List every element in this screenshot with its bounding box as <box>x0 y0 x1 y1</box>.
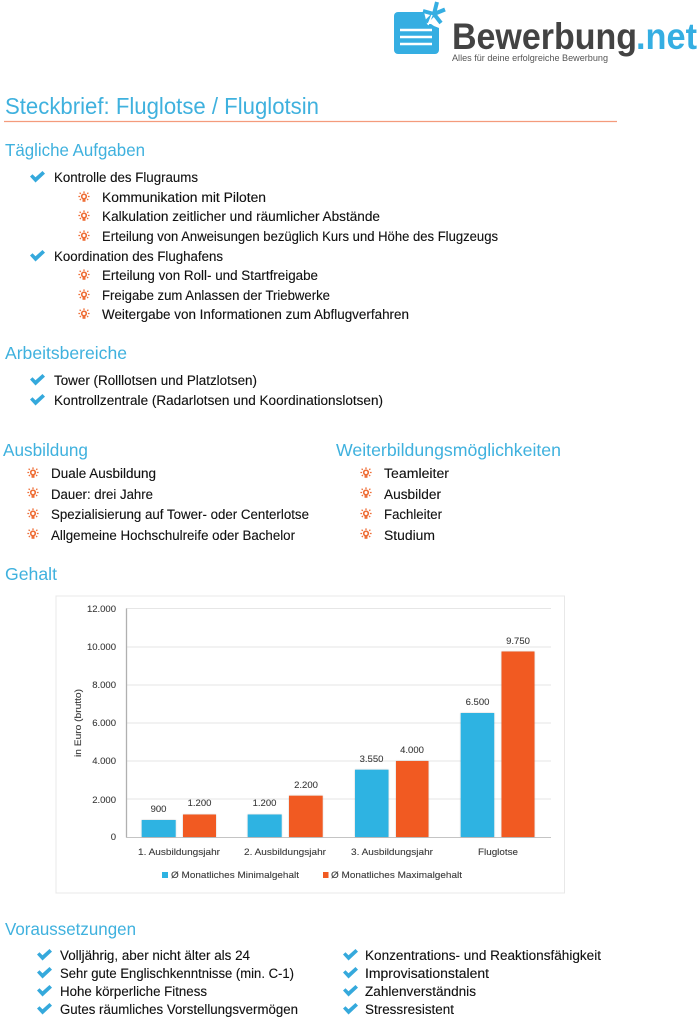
logo: .net <box>636 16 697 57</box>
value labels: 6.500 <box>466 697 489 708</box>
legend <box>162 870 462 881</box>
y axis title: in Euro (brutto) <box>73 689 84 757</box>
icon: logo document <box>394 2 445 54</box>
heading: Arbeitsbereiche <box>5 343 127 363</box>
section: Ausbildung: Duale Ausbildung <box>51 466 156 481</box>
section: Tägliche Aufgaben: Erteilung von Roll- und Startfreigabe <box>102 268 318 283</box>
value labels: 2.200 <box>294 780 318 791</box>
section: Tägliche Aufgaben: Kommunikation mit Piloten <box>102 190 266 205</box>
bar chart: Gehalt <box>56 596 564 893</box>
section: Tägliche Aufgaben: Kalkulation zeitlicher und räumlicher Abstände <box>102 209 380 224</box>
value labels: 9.750 <box>506 636 530 647</box>
section: Tägliche Aufgaben: Koordination des Flughafens <box>54 249 223 264</box>
y axis labels <box>87 604 116 843</box>
y axis labels: 12.000 <box>87 604 116 615</box>
section: Tägliche Aufgaben: Erteilung von Anweisungen bezüglich Kurs und Höhe des Flugzeugs <box>102 229 498 244</box>
section: Arbeitsbereiche: Tower (Rolllotsen und Platzlotsen) <box>54 373 257 388</box>
section: Weiterbildungsmöglichkeiten: Ausbilder <box>384 487 442 502</box>
y axis labels: 4.000 <box>92 756 116 767</box>
category labels: 2. Ausbildungsjahr <box>244 847 326 858</box>
category labels: Fluglotse <box>478 847 518 858</box>
section: Ausbildung <box>3 440 309 543</box>
y axis labels: 10.000 <box>87 642 116 653</box>
section: Tägliche Aufgaben <box>5 140 498 322</box>
heading: Weiterbildungsmöglichkeiten <box>336 440 561 460</box>
section: Arbeitsbereiche: Kontrollzentrale (Radarlotsen und Koordinationslotsen) <box>54 393 383 408</box>
section: Ausbildung: Allgemeine Hochschulreife oder Bachelor <box>51 528 295 543</box>
heading: Ausbildung <box>3 440 88 460</box>
section: Tägliche Aufgaben: Kontrolle des Flugraums <box>54 170 198 185</box>
heading: Gehalt: Gehalt <box>5 564 57 584</box>
right list: Zahlenverständnis <box>365 984 476 999</box>
section: Voraussetzungen <box>5 919 601 1017</box>
bars <box>142 652 534 837</box>
title: Steckbrief: Fluglotse / Fluglotsin <box>5 93 319 119</box>
value labels: 1.200 <box>253 798 276 809</box>
left list: Hohe körperliche Fitness <box>60 984 207 999</box>
value labels: 3.550 <box>360 754 383 765</box>
section: Weiterbildungsmöglichkeiten: Teamleiter <box>384 466 450 481</box>
right list <box>343 948 601 1017</box>
y axis labels: 6.000 <box>92 718 116 729</box>
section: Weiterbildungsmöglichkeiten: Fachleiter <box>384 507 442 522</box>
left list: Sehr gute Englischkenntnisse (min. C-1) <box>60 966 294 981</box>
right list: Konzentrations- und Reaktionsfähigkeit <box>365 948 601 963</box>
logo tagline: Alles für deine erfolgreiche Bewerbung <box>452 53 608 64</box>
section: Tägliche Aufgaben: Weitergabe von Informationen zum Abflugverfahren <box>102 307 409 322</box>
left list: Gutes räumliches Vorstellungsvermögen <box>60 1002 298 1017</box>
section: Weiterbildungsmöglichkeiten <box>336 440 561 543</box>
logo <box>394 2 697 64</box>
section: Tägliche Aufgaben: Freigabe zum Anlassen der Triebwerke <box>102 288 330 303</box>
section: Weiterbildungsmöglichkeiten: Studium <box>384 528 435 543</box>
value labels <box>151 636 530 815</box>
section: Arbeitsbereiche <box>5 343 383 408</box>
heading: Tägliche Aufgaben <box>5 140 145 160</box>
category labels <box>138 847 518 858</box>
left list: Volljährig, aber nicht älter als 24 <box>60 948 250 963</box>
legend: Ø Monatliches Maximalgehalt <box>331 870 462 881</box>
logo wordmark: Bewerbung <box>452 16 637 57</box>
heading: Voraussetzungen <box>5 919 136 939</box>
section: Ausbildung: Spezialisierung auf Tower- oder Centerlotse <box>51 507 309 522</box>
category labels: 1. Ausbildungsjahr <box>138 847 220 858</box>
value labels: 4.000 <box>400 745 424 756</box>
legend: Ø Monatliches Minimalgehalt <box>171 870 299 881</box>
y axis labels: 8.000 <box>92 680 116 691</box>
section: Ausbildung: Dauer: drei Jahre <box>51 487 153 502</box>
right list: Stressresistent <box>365 1002 454 1017</box>
right list: Improvisationstalent <box>365 966 489 981</box>
value labels: 1.200 <box>188 798 211 809</box>
left list <box>37 948 298 1017</box>
value labels: 900 <box>151 804 166 815</box>
y axis labels: 2.000 <box>92 795 116 806</box>
category labels: 3. Ausbildungsjahr <box>351 847 433 858</box>
y axis labels: 0 <box>111 832 116 843</box>
